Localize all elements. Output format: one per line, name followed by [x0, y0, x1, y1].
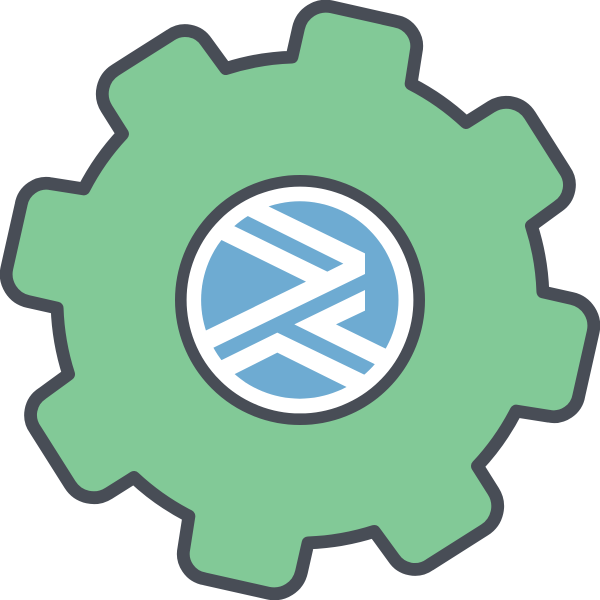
logo: upper blue sliver — [234, 216, 344, 272]
icon: white hub with dark ring — [181, 181, 419, 419]
logo: bottom blue segment — [234, 352, 346, 399]
logo: large blue region — [214, 201, 398, 375]
logo: left blue triangle — [201, 240, 306, 330]
icon: blue chevron logo — [201, 201, 398, 399]
